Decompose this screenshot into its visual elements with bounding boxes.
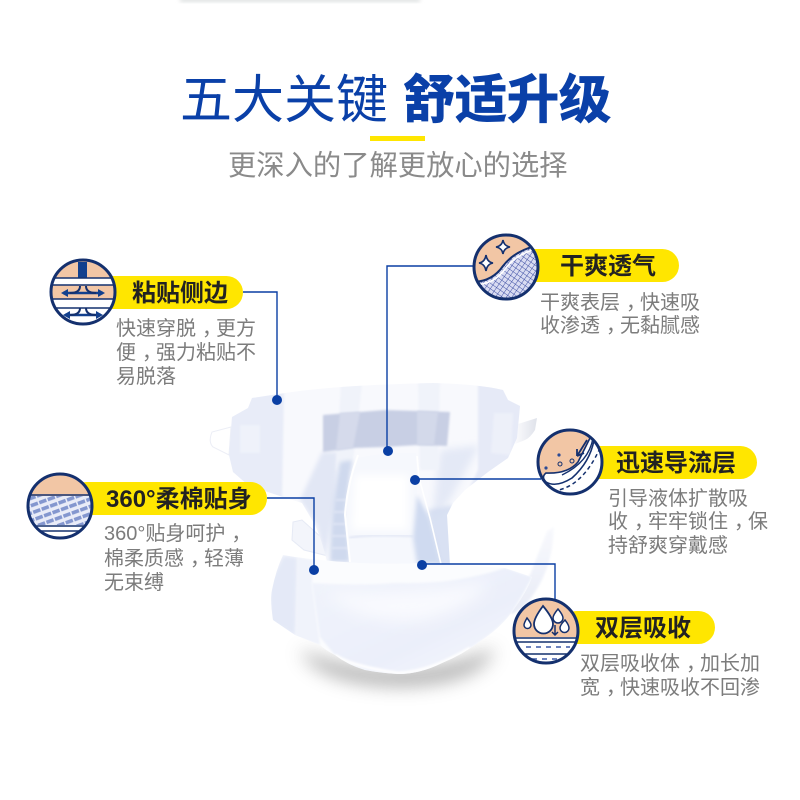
- connector: side tape: [243, 292, 282, 405]
- back panel: [229, 383, 520, 566]
- label text: 干爽透气: [560, 253, 656, 280]
- description: [540, 291, 700, 337]
- back panel shading: [225, 380, 525, 566]
- description: 干爽表层 ，快速吸: [540, 291, 700, 314]
- absorbent pad: [346, 453, 418, 566]
- icon: soft cotton: [26, 472, 94, 539]
- connector: dry surface: [383, 266, 474, 456]
- belly panel: [312, 568, 532, 674]
- ground shadow: [300, 648, 495, 686]
- label pill: [560, 611, 715, 644]
- right side tab: [515, 418, 537, 444]
- description: 无束缚: [104, 571, 164, 594]
- connector: double absorb: [417, 560, 555, 600]
- description: [608, 487, 768, 557]
- pad highlight: [352, 475, 408, 530]
- description: 引导液体扩散吸: [608, 487, 748, 510]
- description: 快速穿脱 ，更方: [116, 317, 256, 340]
- label text: 360°柔棉贴身: [106, 486, 252, 513]
- front shading: [268, 555, 532, 674]
- title: 五大关键: [180, 72, 388, 130]
- connector: cotton: [267, 498, 319, 575]
- description: [580, 652, 760, 699]
- panel: 360°柔棉贴身: [26, 472, 267, 594]
- icon: double layer absorb: [512, 597, 580, 664]
- description: 收 ，牢牢锁住 ，保: [608, 510, 768, 533]
- description: 双层吸收体 ，加长加: [580, 652, 760, 675]
- connector: quick flow: [410, 475, 541, 485]
- panel: 干爽透气: [472, 234, 700, 337]
- label text: 双层吸收: [595, 615, 691, 642]
- label pill: [70, 482, 267, 515]
- right channel shade: [413, 495, 441, 564]
- tape overlay strips: [336, 412, 360, 450]
- description: 收渗透 ，无黏腻感: [540, 314, 700, 337]
- description: 便 ，强力粘贴不: [116, 341, 256, 364]
- belly highlight: [354, 590, 470, 618]
- right gathers: [428, 504, 452, 564]
- right seam: [417, 456, 441, 564]
- title: [180, 72, 611, 130]
- top edge shadow: [180, 0, 420, 2]
- label text: 迅速导流层: [616, 450, 736, 477]
- top waist strip right: [418, 382, 440, 470]
- left gathers: [292, 520, 328, 556]
- icon: fast flow: [536, 428, 603, 495]
- subtitle: 更深入的了解更放心的选择: [228, 149, 568, 181]
- label pill: [580, 446, 757, 479]
- description: 持舒爽穿戴感: [608, 534, 728, 557]
- left side tab: [210, 427, 231, 455]
- pad left seam: [345, 455, 358, 562]
- description: [116, 317, 256, 388]
- panel: 双层吸收: [512, 597, 760, 699]
- description: [104, 522, 251, 594]
- description: 宽 ，快速吸收不回渗: [580, 676, 760, 699]
- title: 舒适升级: [403, 72, 611, 130]
- icon: dry surface: [472, 234, 540, 302]
- panel: 迅速导流层: [536, 428, 768, 557]
- front side band: [271, 556, 298, 634]
- top waist strip left: [336, 384, 362, 470]
- panel: 粘贴侧边: [50, 259, 256, 388]
- lower left shade: [300, 452, 338, 560]
- right wing patch: [491, 413, 513, 455]
- second side band: [298, 558, 318, 643]
- description: 360°贴身呵护 ，: [104, 522, 251, 545]
- front waist band: [271, 555, 532, 674]
- diaper illustration: [210, 380, 554, 686]
- left wing panel: [229, 394, 284, 496]
- right fold shade: [432, 446, 476, 508]
- right flap: [500, 527, 554, 614]
- label text: 粘贴侧边: [132, 280, 228, 307]
- right wing panel: [472, 386, 520, 484]
- pad fold: [349, 535, 413, 538]
- label pill: [510, 249, 679, 282]
- icon: side tape layers: [50, 259, 116, 325]
- label pill: [90, 276, 243, 309]
- left wing patch: [240, 425, 260, 453]
- hook tape: [323, 410, 450, 452]
- title underline: [370, 136, 425, 141]
- description: 棉柔质感 ，轻薄: [104, 547, 244, 570]
- left ruffled band: [330, 460, 352, 562]
- belly rim: [335, 648, 470, 673]
- description: 易脱落: [116, 365, 176, 388]
